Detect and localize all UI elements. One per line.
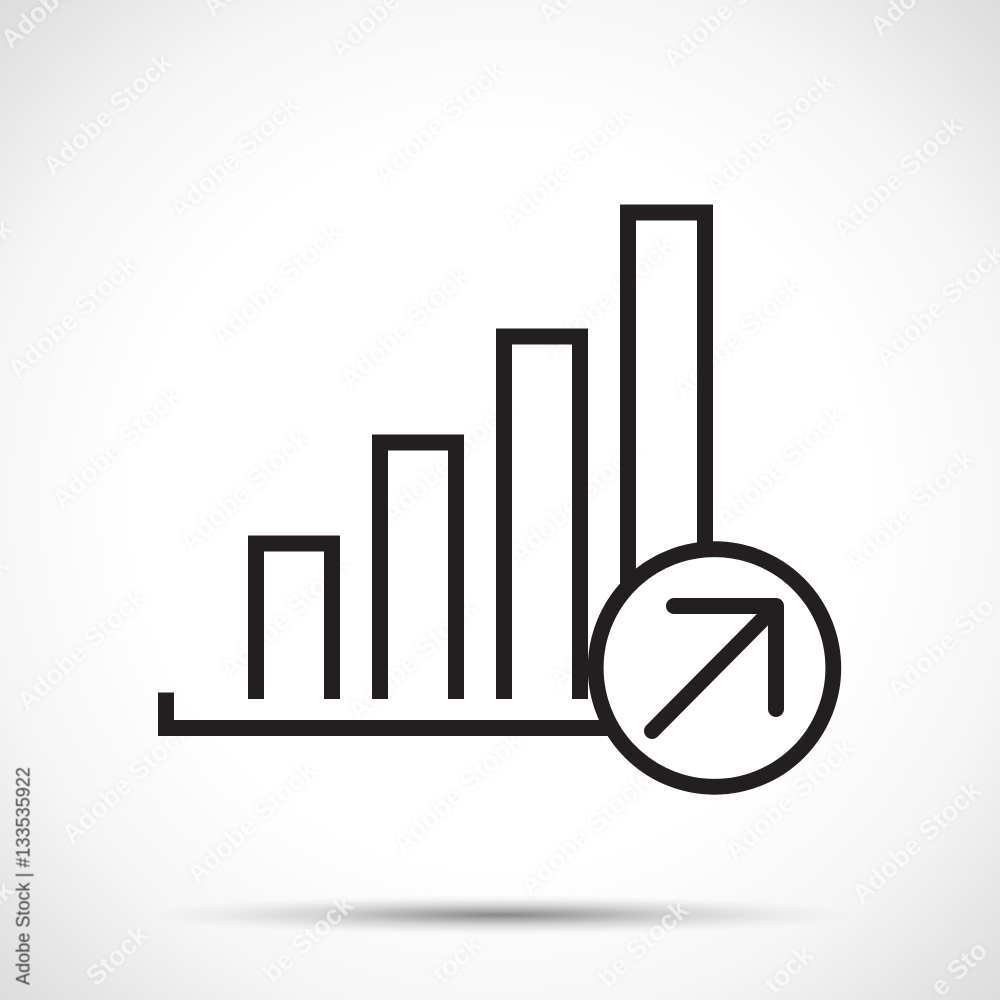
watermark pattern: Adobe Stock <box>164 89 305 224</box>
watermark pattern: Stock <box>80 919 155 992</box>
watermark pattern: Adobe Stock <box>514 766 655 901</box>
watermark pattern: Adobe Stock <box>181 754 322 889</box>
watermark pattern: Adobe Stock <box>846 774 987 909</box>
watermark pattern: Adobe Stock <box>214 549 355 684</box>
bar chart icon <box>166 212 705 728</box>
watermark pattern: Adobe Stock <box>544 559 685 694</box>
watermark pattern: Adobe Stock <box>37 46 178 181</box>
watermark pattern: Adobe Stock <box>539 229 680 364</box>
floor shadow <box>145 895 855 935</box>
watermark pattern: tock <box>758 939 820 999</box>
watermark pattern: Adobe Stock <box>504 434 645 569</box>
watermark pattern: Adobe Stock <box>369 54 510 189</box>
watermark pattern: Adobe Stock <box>11 581 152 716</box>
bar 1 <box>256 544 332 699</box>
watermark pattern: be Stock <box>256 889 360 988</box>
stock credit text: Adobe Stock | #133535922 <box>12 767 34 985</box>
bar 3 <box>504 336 580 699</box>
bar 2 <box>380 442 456 699</box>
watermark pattern: Adobe Sto <box>881 590 1000 704</box>
icon: circle with up-right arrow <box>596 549 833 787</box>
watermark pattern: Adobe Stock <box>839 442 980 577</box>
watermark pattern: Adobe Stock <box>699 66 840 201</box>
axis line <box>166 692 620 728</box>
watermark pattern: Adobe Stock <box>206 216 347 351</box>
watermark pattern: Adobe Stock <box>709 399 850 534</box>
bar 4 <box>628 212 705 600</box>
watermark pattern: Adobe Stock <box>342 591 483 726</box>
watermark pattern: Adobe Stock <box>496 99 637 234</box>
watermark pattern: Adobe Stock <box>56 714 197 849</box>
watermark pattern: tock <box>426 929 488 989</box>
watermark pattern: e Sto <box>924 935 993 1000</box>
watermark pattern: Adobe Stock <box>387 724 528 859</box>
watermark pattern: Adobe Stock <box>2 249 143 384</box>
watermark pattern: Adobe Stock <box>719 731 860 866</box>
watermark pattern: Adobe Stock <box>376 394 517 529</box>
badge circle <box>596 549 833 787</box>
watermark pattern: Adobe Stock <box>46 379 187 514</box>
watermark pattern: Adobe Stock <box>667 269 808 404</box>
watermark pattern: Adobe Stock <box>334 259 475 394</box>
watermark pattern: be Stock <box>591 894 695 993</box>
watermark pattern: Adobe Stock <box>827 109 968 244</box>
arrow <box>652 606 776 731</box>
watermark pattern: Adobe Stock <box>174 422 315 557</box>
